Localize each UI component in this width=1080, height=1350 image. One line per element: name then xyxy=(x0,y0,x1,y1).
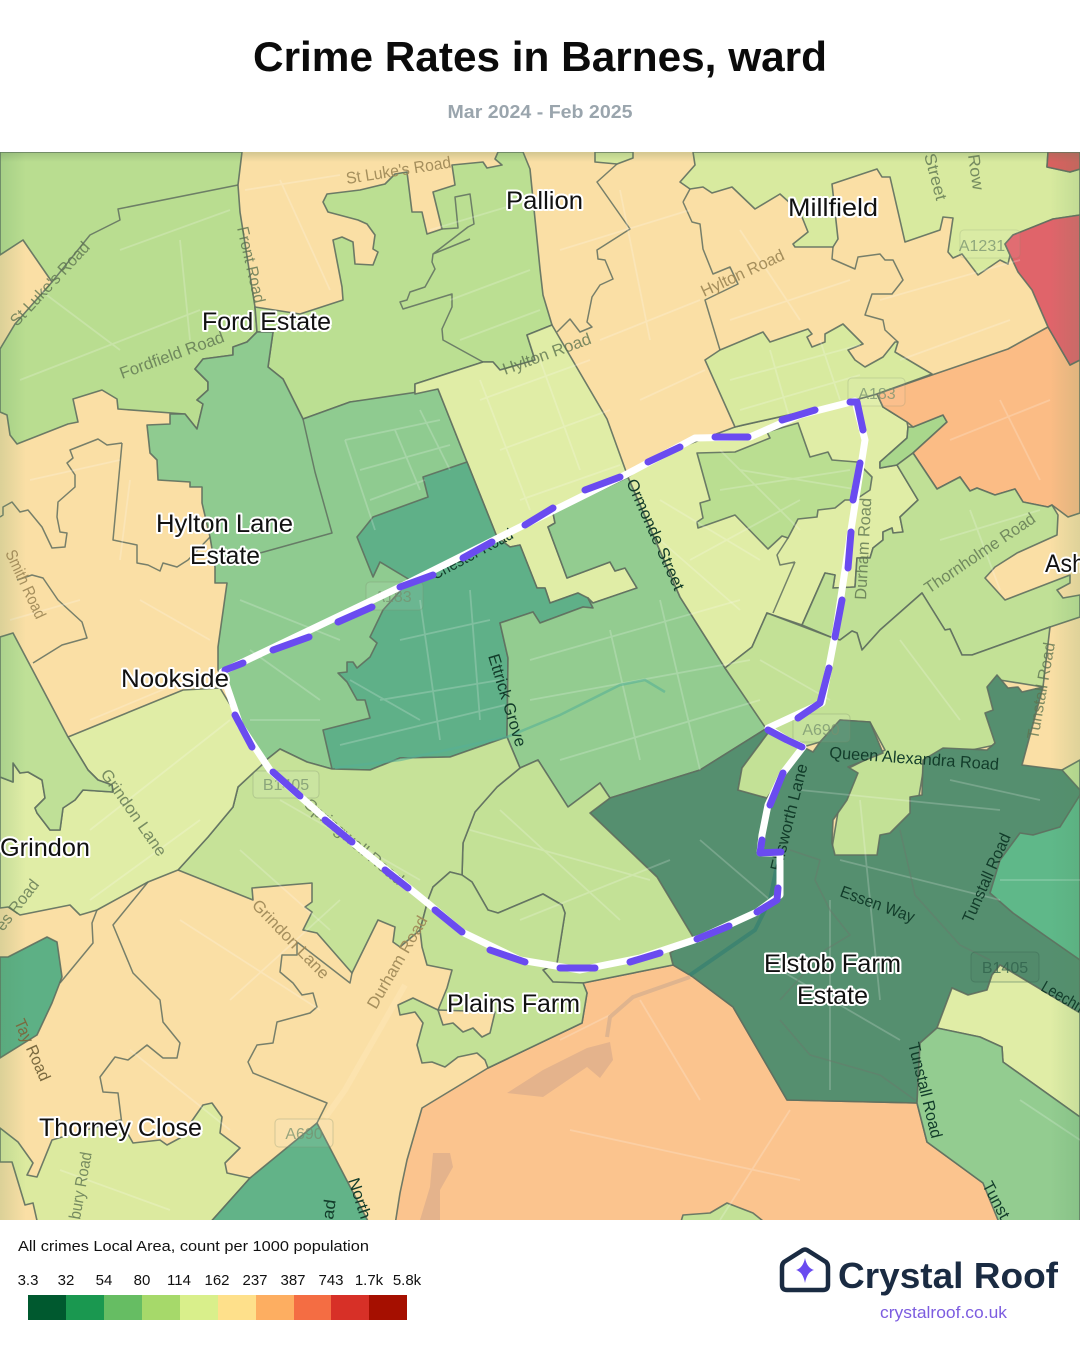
place: Ford Estate: Ford Estate xyxy=(202,308,331,336)
place: Plains Farm: Plains Farm xyxy=(447,990,580,1018)
road: Front Road: Front Road xyxy=(233,225,268,305)
legend colour scale xyxy=(28,1295,407,1320)
road: Springwell Road: Springwell Road xyxy=(300,795,407,889)
map area: Thornholme lime xyxy=(802,453,1080,655)
place: Grindon: Grindon xyxy=(0,834,90,862)
road shields xyxy=(253,230,1039,1147)
road shields: A183 xyxy=(374,589,412,606)
road: Grindon Lane south: Grindon Lane xyxy=(248,896,333,983)
road: Tunst: Tunst xyxy=(978,1178,1013,1223)
road: Smith Road: Smith Road xyxy=(1,547,49,622)
map area: south-west pale xyxy=(0,1103,250,1225)
logo: Crystal Roof xyxy=(782,1250,1059,1322)
stream near Elstob xyxy=(690,860,778,975)
road: Tunstall Road middle: Tunstall Road xyxy=(959,831,1015,926)
road: Ellsworth Lane: Ellsworth Lane xyxy=(767,762,811,873)
boundary lines inside same-colour areas xyxy=(0,164,903,1125)
map area: south-west green xyxy=(0,937,62,1058)
legend xyxy=(18,1238,422,1320)
road: Hylton Road west: Hylton Road xyxy=(500,330,594,379)
street network xyxy=(10,175,1080,1220)
road shields: B1405 xyxy=(982,960,1028,977)
road: Chester Road: Chester Road xyxy=(428,525,516,584)
stream near the lake xyxy=(607,977,690,1037)
map area: lime pocket north of Durham Road xyxy=(697,423,872,549)
legend values: 32 xyxy=(58,1272,74,1289)
map area: south-east green xyxy=(917,1028,1080,1225)
place: Millfield: Millfield xyxy=(788,194,878,222)
map area: Plains Farm lime xyxy=(398,872,587,1068)
road: St Luke's Road west: St Luke's Road xyxy=(7,238,94,330)
legend values: 80 xyxy=(134,1272,150,1289)
road: Street: Street xyxy=(920,151,950,203)
lakes xyxy=(420,1042,613,1220)
road: Ormonde Street: Ormonde Street xyxy=(622,476,688,594)
place: Thorney Close: Thorney Close xyxy=(39,1114,202,1142)
map area: lime notch xyxy=(738,733,803,798)
road: North: North xyxy=(344,1176,374,1221)
map area: south centre lime xyxy=(462,760,693,983)
map area: red hotspot xyxy=(1005,215,1080,365)
map area: Barnes centre pale xyxy=(415,325,637,603)
map area: pond strip lime xyxy=(880,415,947,468)
road: Essen Way: Essen Way xyxy=(838,883,918,927)
road: Hylton Road east: Hylton Road xyxy=(698,246,787,301)
place labels xyxy=(0,187,1080,1142)
legend values: 54 xyxy=(96,1272,112,1289)
road: Fordfield Road: Fordfield Road xyxy=(117,328,227,383)
road: rad: ad xyxy=(319,1198,340,1221)
map area: Queen Alexandra lime xyxy=(725,593,1050,860)
map area: Springwell lime xyxy=(178,737,520,973)
place: Elstob Farm: Elstob Farm xyxy=(764,950,901,978)
road: Ettrick Grove: Ettrick Grove xyxy=(484,652,529,749)
legend values: 3.3 xyxy=(18,1272,38,1289)
map area: Grindon pale xyxy=(0,688,265,915)
road: St Luke's Road north: St Luke's Road xyxy=(345,154,452,188)
map area: north-west lime xyxy=(0,152,257,444)
map area: Plains Farm tan pocket xyxy=(438,1010,495,1037)
road labels xyxy=(0,151,1080,1223)
map area: eastern lime sliver xyxy=(1062,759,1080,790)
map area: west and ward mid green xyxy=(146,331,466,768)
map area: orange east xyxy=(877,327,1080,517)
road: Tay Road: Tay Road xyxy=(10,1016,54,1084)
map area: bottom lime bump xyxy=(680,1202,763,1220)
website url: crystalroof.co.uk xyxy=(880,1304,1008,1322)
road: Tunstall Road north: Tunstall Road xyxy=(1024,641,1059,741)
map area: Millfield pale xyxy=(680,152,1080,275)
road: Row: Row xyxy=(964,153,987,191)
wide A690 road strip xyxy=(325,985,405,1118)
road shields: A183 xyxy=(858,386,896,403)
road: Durham Road south: Durham Road xyxy=(364,913,431,1012)
road: Thornholme Road: Thornholme Road xyxy=(921,510,1039,597)
ward boundary: white casing xyxy=(222,401,865,970)
B1405 boundary xyxy=(780,830,990,1100)
logo wordmark: Crystal Roof xyxy=(838,1255,1059,1296)
legend values: 5.8k xyxy=(393,1272,422,1289)
legend values xyxy=(18,1272,422,1289)
map area: Tunstall green xyxy=(990,795,1080,960)
map area: Ormonde and Durham pale xyxy=(628,394,918,668)
map area: A183 lime xyxy=(705,324,932,427)
road: Grindon Lane north: Grindon Lane xyxy=(97,766,170,860)
map area: Pallion south lime xyxy=(255,152,552,419)
subtitle: date range: Mar 2024 - Feb 2025 xyxy=(448,102,632,122)
place: Hylton Lane Estate: Estate xyxy=(190,542,260,570)
ward boundary: purple dashes xyxy=(225,402,863,968)
road shields: A1231 xyxy=(959,238,1005,255)
road: Durham Road east: Durham Road xyxy=(852,497,875,600)
choropleth map xyxy=(0,151,1080,1225)
vignette xyxy=(0,152,1080,1220)
place: Pallion: Pallion xyxy=(506,187,583,215)
map area: orange south xyxy=(395,965,1005,1225)
road: bury Road: bury Road xyxy=(66,1151,96,1221)
map area: south green xyxy=(208,1123,370,1225)
map area: Elstob Farm dark xyxy=(590,675,1080,1103)
map area: Barnes central green xyxy=(323,462,593,770)
icon: house with star xyxy=(782,1250,828,1290)
road shields: A690 xyxy=(802,722,840,739)
road shields: B1405 xyxy=(263,777,309,794)
place: Hylton Lane: Hylton Lane xyxy=(156,510,293,538)
place: Elstob Farm Estate: Estate xyxy=(797,982,868,1010)
legend values: 1.7k xyxy=(355,1272,384,1289)
title: Crime Rates in Barnes, ward xyxy=(253,33,827,80)
legend title: All crimes Local Area, count per 1000 population xyxy=(18,1238,369,1255)
road shields: A690 xyxy=(285,1126,323,1143)
map area: Leechmere pale xyxy=(937,965,1080,1117)
map area: west lime xyxy=(0,633,113,830)
legend values: 114 xyxy=(167,1272,191,1289)
place: Nookside: Nookside xyxy=(121,665,229,693)
legend values: 387 xyxy=(280,1272,306,1289)
map area: top sliver xyxy=(595,152,633,164)
legend values: 743 xyxy=(318,1272,344,1289)
map area: Barnes east mid green xyxy=(500,477,767,807)
river xyxy=(335,680,665,768)
road: Queen Alexandra Road: Queen Alexandra Road xyxy=(829,744,1000,774)
map area: red corner xyxy=(1047,152,1080,172)
legend values: 162 xyxy=(204,1272,230,1289)
road: Tunstall Road south: Tunstall Road xyxy=(904,1041,945,1140)
legend values: 237 xyxy=(242,1272,268,1289)
